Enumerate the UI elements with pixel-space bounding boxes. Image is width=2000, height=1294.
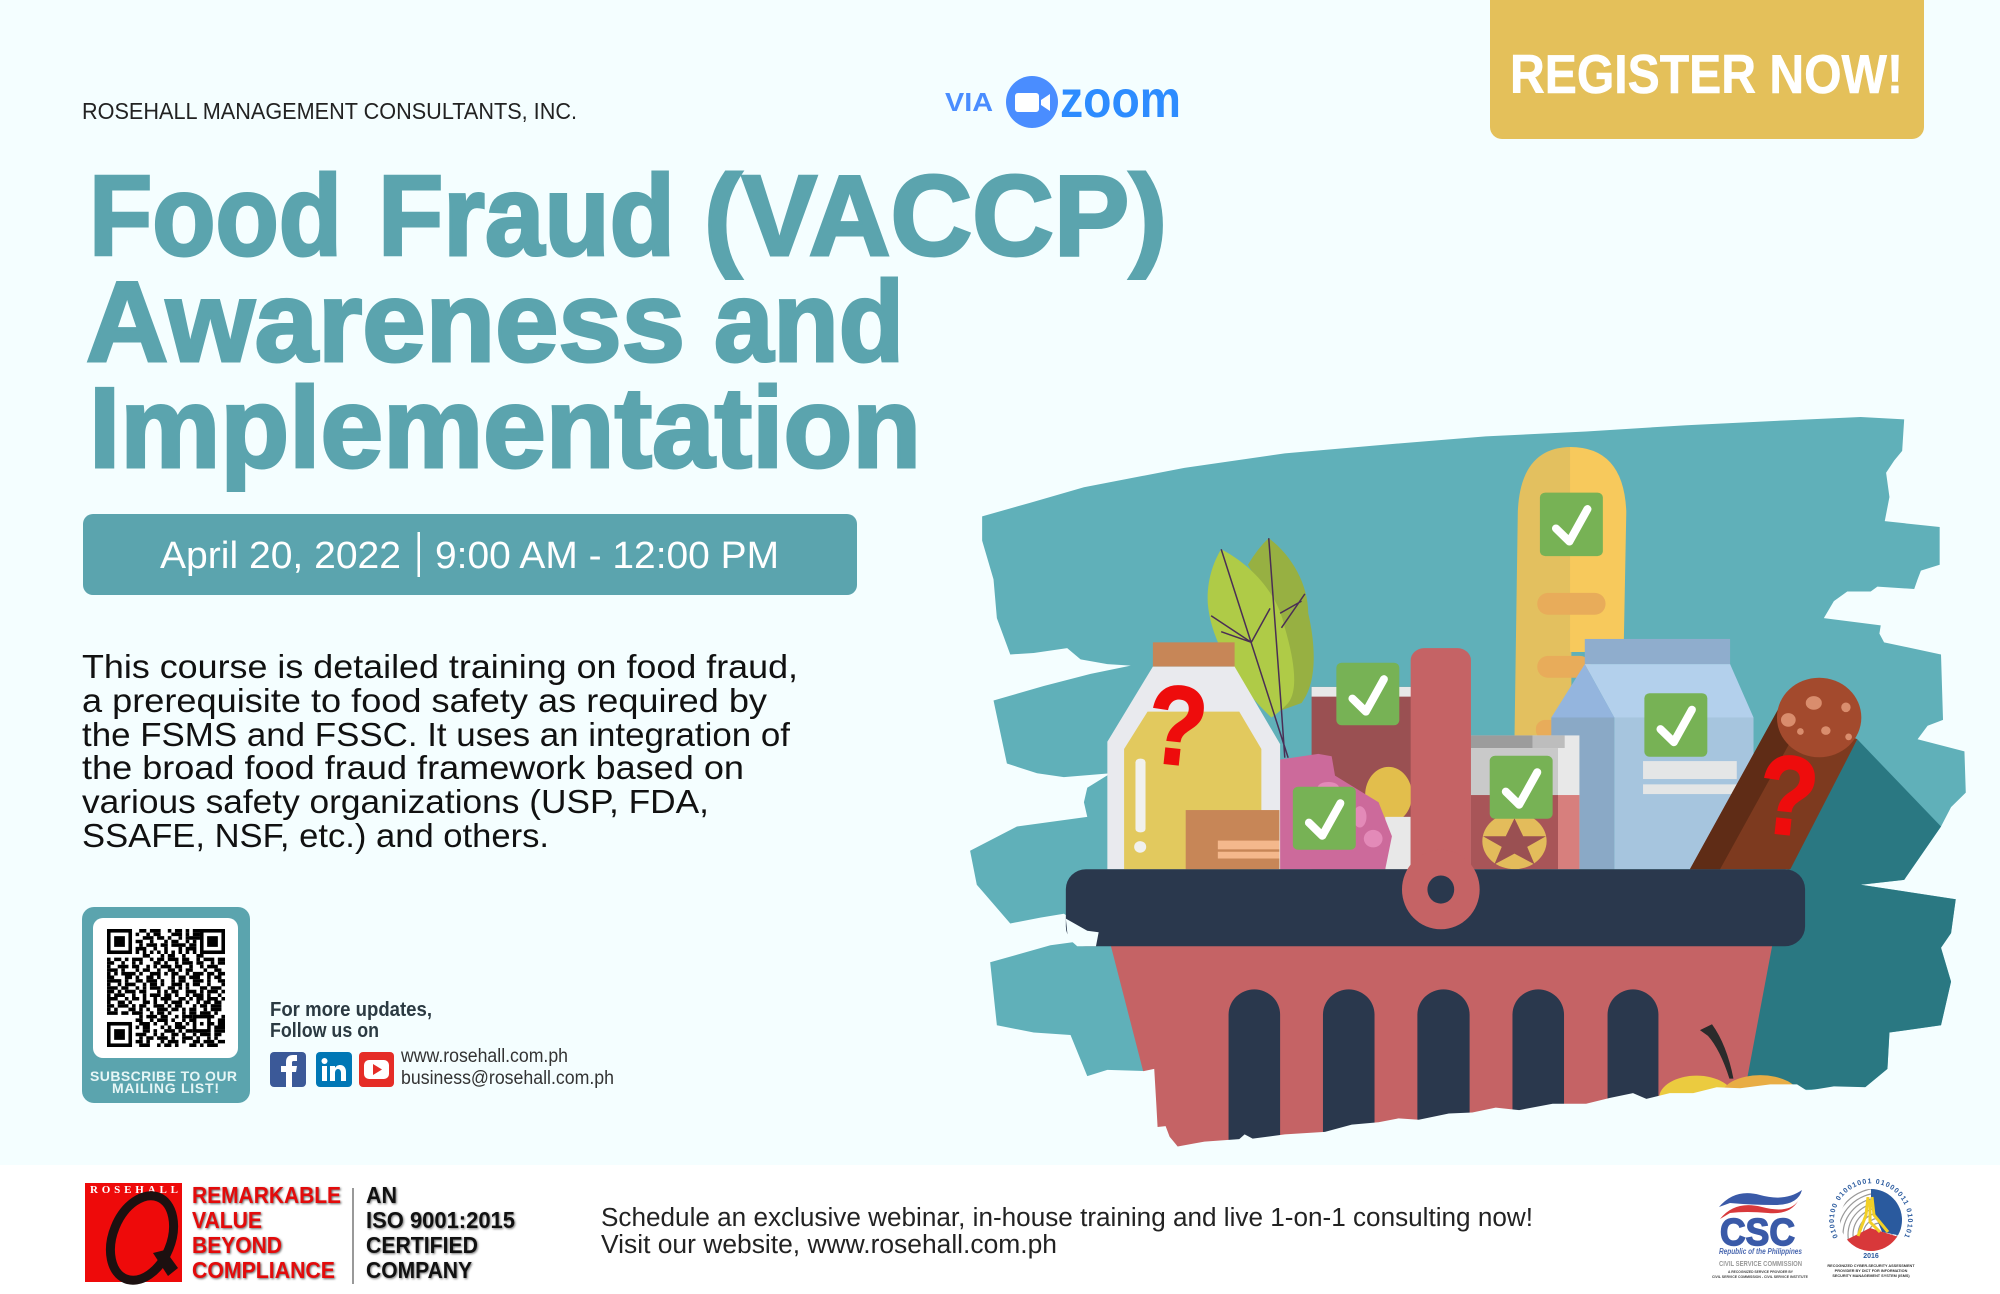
qr code bbox=[107, 929, 225, 1047]
follow us block: Follow us on bbox=[270, 1020, 379, 1042]
csc logo: CIVIL SERVICE COMMISSION - CIVIL SERVICE INSTITUTE bbox=[1712, 1275, 1809, 1279]
brush shadow bbox=[1740, 739, 1956, 1091]
course description: SSAFE, NSF, etc.) and others. bbox=[82, 817, 549, 854]
footer call to action: Visit our website, www.rosehall.com.ph bbox=[601, 1231, 1057, 1259]
apple bbox=[1659, 1024, 1799, 1120]
course description: various safety organizations (USP, FDA, bbox=[82, 783, 709, 820]
date and time bar bbox=[83, 514, 857, 595]
company tagline bbox=[192, 1182, 341, 1283]
title: Fraud bbox=[378, 153, 675, 280]
title: (VACCP) bbox=[704, 153, 1167, 280]
company tagline: BEYOND bbox=[192, 1232, 282, 1258]
basket rim bbox=[1066, 869, 1805, 946]
can bbox=[1471, 735, 1579, 869]
subscribe label: MAILING LIST! bbox=[112, 1080, 219, 1096]
register now banner bbox=[1490, 0, 1924, 139]
check badge: jar bbox=[1336, 663, 1399, 725]
iso certification: AN bbox=[366, 1182, 397, 1208]
date and time bar: 9:00 AM - 12:00 PM bbox=[435, 535, 779, 577]
contact details: business@rosehall.com.ph bbox=[401, 1068, 614, 1089]
follow us block: For more updates, bbox=[270, 999, 432, 1021]
milk carton bbox=[1551, 639, 1754, 869]
contact details bbox=[400, 1046, 614, 1089]
basket slots bbox=[1229, 989, 1658, 1144]
bottle bbox=[1107, 642, 1280, 869]
check badge: pink bag bbox=[1293, 787, 1356, 850]
check badge: bread bbox=[1540, 493, 1603, 556]
footer call to action: Schedule an exclusive webinar, in-house training and live 1-on-1 consulting now! bbox=[601, 1204, 1533, 1232]
bread bbox=[1514, 447, 1626, 739]
brush stroke bbox=[970, 417, 1966, 1146]
pink bag bbox=[1279, 754, 1392, 869]
check badge: milk bbox=[1644, 693, 1707, 757]
qr subscribe card bbox=[82, 907, 250, 1103]
dict seal: 0100100 01001001 01000011 01010100 bbox=[1829, 1178, 1913, 1238]
zoom wordmark: zoom bbox=[1060, 71, 1181, 129]
rosehall q logo bbox=[85, 1183, 185, 1290]
question mark: bottle: ? bbox=[1141, 661, 1213, 792]
course description: the FSMS and FSSC. It uses an integration of bbox=[82, 716, 791, 753]
iso certification: COMPANY bbox=[366, 1257, 472, 1283]
title bbox=[86, 153, 1167, 492]
course description: the broad food fraud framework based on bbox=[82, 749, 744, 786]
rosehall q logo: ROSEHALL bbox=[90, 1184, 178, 1196]
organiser name: ROSEHALL MANAGEMENT CONSULTANTS, INC. bbox=[82, 98, 577, 124]
leaves bbox=[1208, 538, 1314, 758]
check badge: can bbox=[1490, 756, 1553, 819]
csc logo: CSC bbox=[1720, 1212, 1795, 1254]
dict seal: RECOGNIZED CYBER-SECURITY ASSESSMENT bbox=[1827, 1264, 1915, 1268]
dict seal: 2016 bbox=[1863, 1253, 1879, 1260]
dict seal bbox=[1828, 1178, 1915, 1278]
company tagline: REMARKABLE bbox=[192, 1182, 341, 1208]
question mark: sausage: ? bbox=[1752, 731, 1824, 862]
date and time bar: April 20, 2022 bbox=[160, 535, 401, 577]
csc logo: A RECOGNIZED SERVICE PROVIDER BY bbox=[1728, 1270, 1794, 1274]
torn bottom edge bbox=[1131, 1069, 1871, 1160]
course description bbox=[82, 648, 798, 854]
torn rim edge bbox=[1066, 919, 1099, 946]
illustration: grocery basket on teal brush stroke bbox=[970, 417, 1966, 1160]
icon: linkedin bbox=[316, 1052, 352, 1087]
back jar bbox=[1312, 687, 1412, 869]
dict seal: SECURITY MANAGEMENT SYSTEM (ISMS) bbox=[1832, 1274, 1910, 1278]
title: Awareness bbox=[86, 259, 685, 386]
sausage bbox=[1690, 678, 1861, 869]
iso certification: CERTIFIED bbox=[366, 1232, 478, 1258]
company tagline: VALUE bbox=[192, 1207, 262, 1233]
csc logo bbox=[1712, 1190, 1809, 1279]
via zoom logo bbox=[945, 71, 1181, 129]
csc logo: Republic of the Philippines bbox=[1719, 1247, 1802, 1256]
icon: youtube bbox=[359, 1052, 394, 1087]
title: Food bbox=[89, 153, 342, 280]
basket body bbox=[1111, 945, 1772, 1151]
course description: This course is detailed training on food fraud, bbox=[82, 648, 798, 685]
subscribe label bbox=[90, 1068, 237, 1096]
title: and bbox=[714, 259, 904, 386]
zoom camera icon bbox=[1006, 76, 1058, 128]
dict seal: PROVIDER BY DICT FOR INFORMATION bbox=[1835, 1269, 1908, 1273]
footer call to action bbox=[601, 1204, 1533, 1259]
company tagline: COMPLIANCE bbox=[192, 1257, 335, 1283]
follow us block bbox=[270, 999, 432, 1042]
basket handle bbox=[1402, 648, 1480, 929]
icon: facebook bbox=[270, 1052, 306, 1087]
iso certification: ISO 9001:2015 bbox=[366, 1207, 515, 1233]
contact details: www.rosehall.com.ph bbox=[400, 1046, 568, 1067]
seal disc bbox=[1840, 1189, 1902, 1251]
via label: VIA bbox=[945, 87, 993, 117]
subscribe label: SUBSCRIBE TO OUR bbox=[90, 1068, 237, 1084]
iso certification bbox=[366, 1182, 515, 1283]
csc logo: CIVIL SERVICE COMMISSION bbox=[1719, 1259, 1802, 1268]
course description: a prerequisite to food safety as required by bbox=[82, 682, 768, 719]
title: Implementation bbox=[89, 365, 921, 492]
register now banner: REGISTER NOW! bbox=[1510, 43, 1903, 105]
